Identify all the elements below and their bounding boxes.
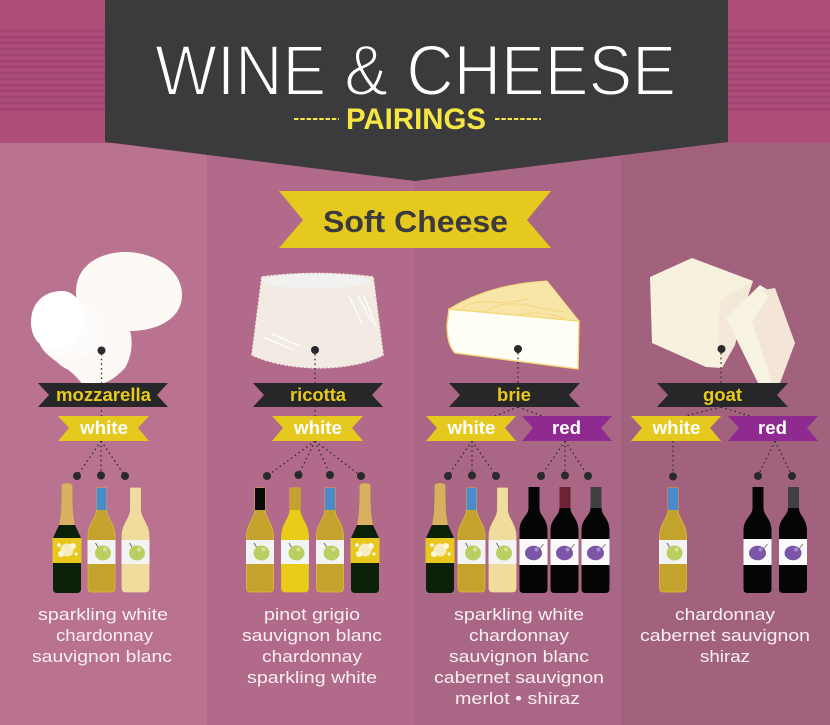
label: mozzarella white: white: [79, 418, 128, 438]
bottles: goat: [659, 487, 807, 593]
label: ricotta white: white: [293, 418, 342, 438]
wine list: ricotta: pinot grigio: [264, 606, 360, 624]
cheese: brie: [447, 281, 579, 369]
label: brie: brie: [497, 385, 531, 405]
label: brie white: white: [446, 418, 496, 438]
dark title pennant: [105, 0, 728, 181]
wine list: brie: cabernet sauvignon: [434, 669, 604, 687]
connector dots: [73, 345, 796, 480]
wine list: brie: sparkling white: [454, 606, 584, 624]
title: WINE & CHEESE: [155, 32, 676, 111]
wine list: goat: chardonnay: [675, 606, 776, 624]
subtitle: pairings: PAIRINGS: [346, 103, 486, 136]
wine list: brie: [434, 606, 604, 708]
label: mozzarella: [38, 383, 168, 407]
wine list: ricotta: chardonnay: [262, 648, 363, 666]
wine list: mozzarella: sauvignon blanc: [32, 648, 172, 666]
label: goat white: white: [651, 418, 700, 438]
wine list: goat: [640, 606, 810, 666]
banner: soft cheese: [279, 191, 551, 248]
cheese: ricotta: [252, 274, 383, 368]
label: goat: [657, 383, 788, 407]
wine list: goat: shiraz: [700, 648, 750, 666]
cheese: mozzarella: [31, 252, 182, 384]
wine list: mozzarella: chardonnay: [56, 627, 154, 645]
label: goat red: red: [758, 418, 787, 438]
banner: soft cheese: Soft Cheese: [323, 204, 508, 239]
label: brie: [449, 383, 580, 407]
wine list: brie: sauvignon blanc: [449, 648, 589, 666]
connectors: [77, 353, 792, 476]
wine list: ricotta: sauvignon blanc: [242, 627, 382, 645]
label: brie red: red: [552, 418, 581, 438]
bottles: mozzarella: [52, 483, 150, 593]
label: goat red: [728, 416, 818, 441]
wine list: mozzarella: [32, 606, 172, 666]
label: ricotta: ricotta: [290, 385, 347, 405]
wine list: ricotta: [242, 606, 382, 687]
bottles: brie: [426, 483, 610, 593]
bottles: ricotta: [246, 483, 380, 593]
label: brie red: [522, 416, 612, 441]
label: mozzarella white: [58, 416, 149, 441]
label: brie white: [426, 416, 516, 441]
cheese: goat: [650, 258, 795, 383]
wine list: brie: merlot • shiraz: [455, 690, 580, 708]
label: mozzarella: mozzarella: [56, 385, 152, 405]
wine list: mozzarella: sparkling white: [38, 606, 168, 624]
label: ricotta: [253, 383, 383, 407]
wine list: ricotta: sparkling white: [247, 669, 377, 687]
wine list: brie: chardonnay: [469, 627, 570, 645]
label: goat: goat: [703, 385, 742, 405]
wine list: goat: cabernet sauvignon: [640, 627, 810, 645]
header band: [0, 0, 830, 143]
label: ricotta white: [272, 416, 363, 441]
label: goat white: [631, 416, 721, 441]
